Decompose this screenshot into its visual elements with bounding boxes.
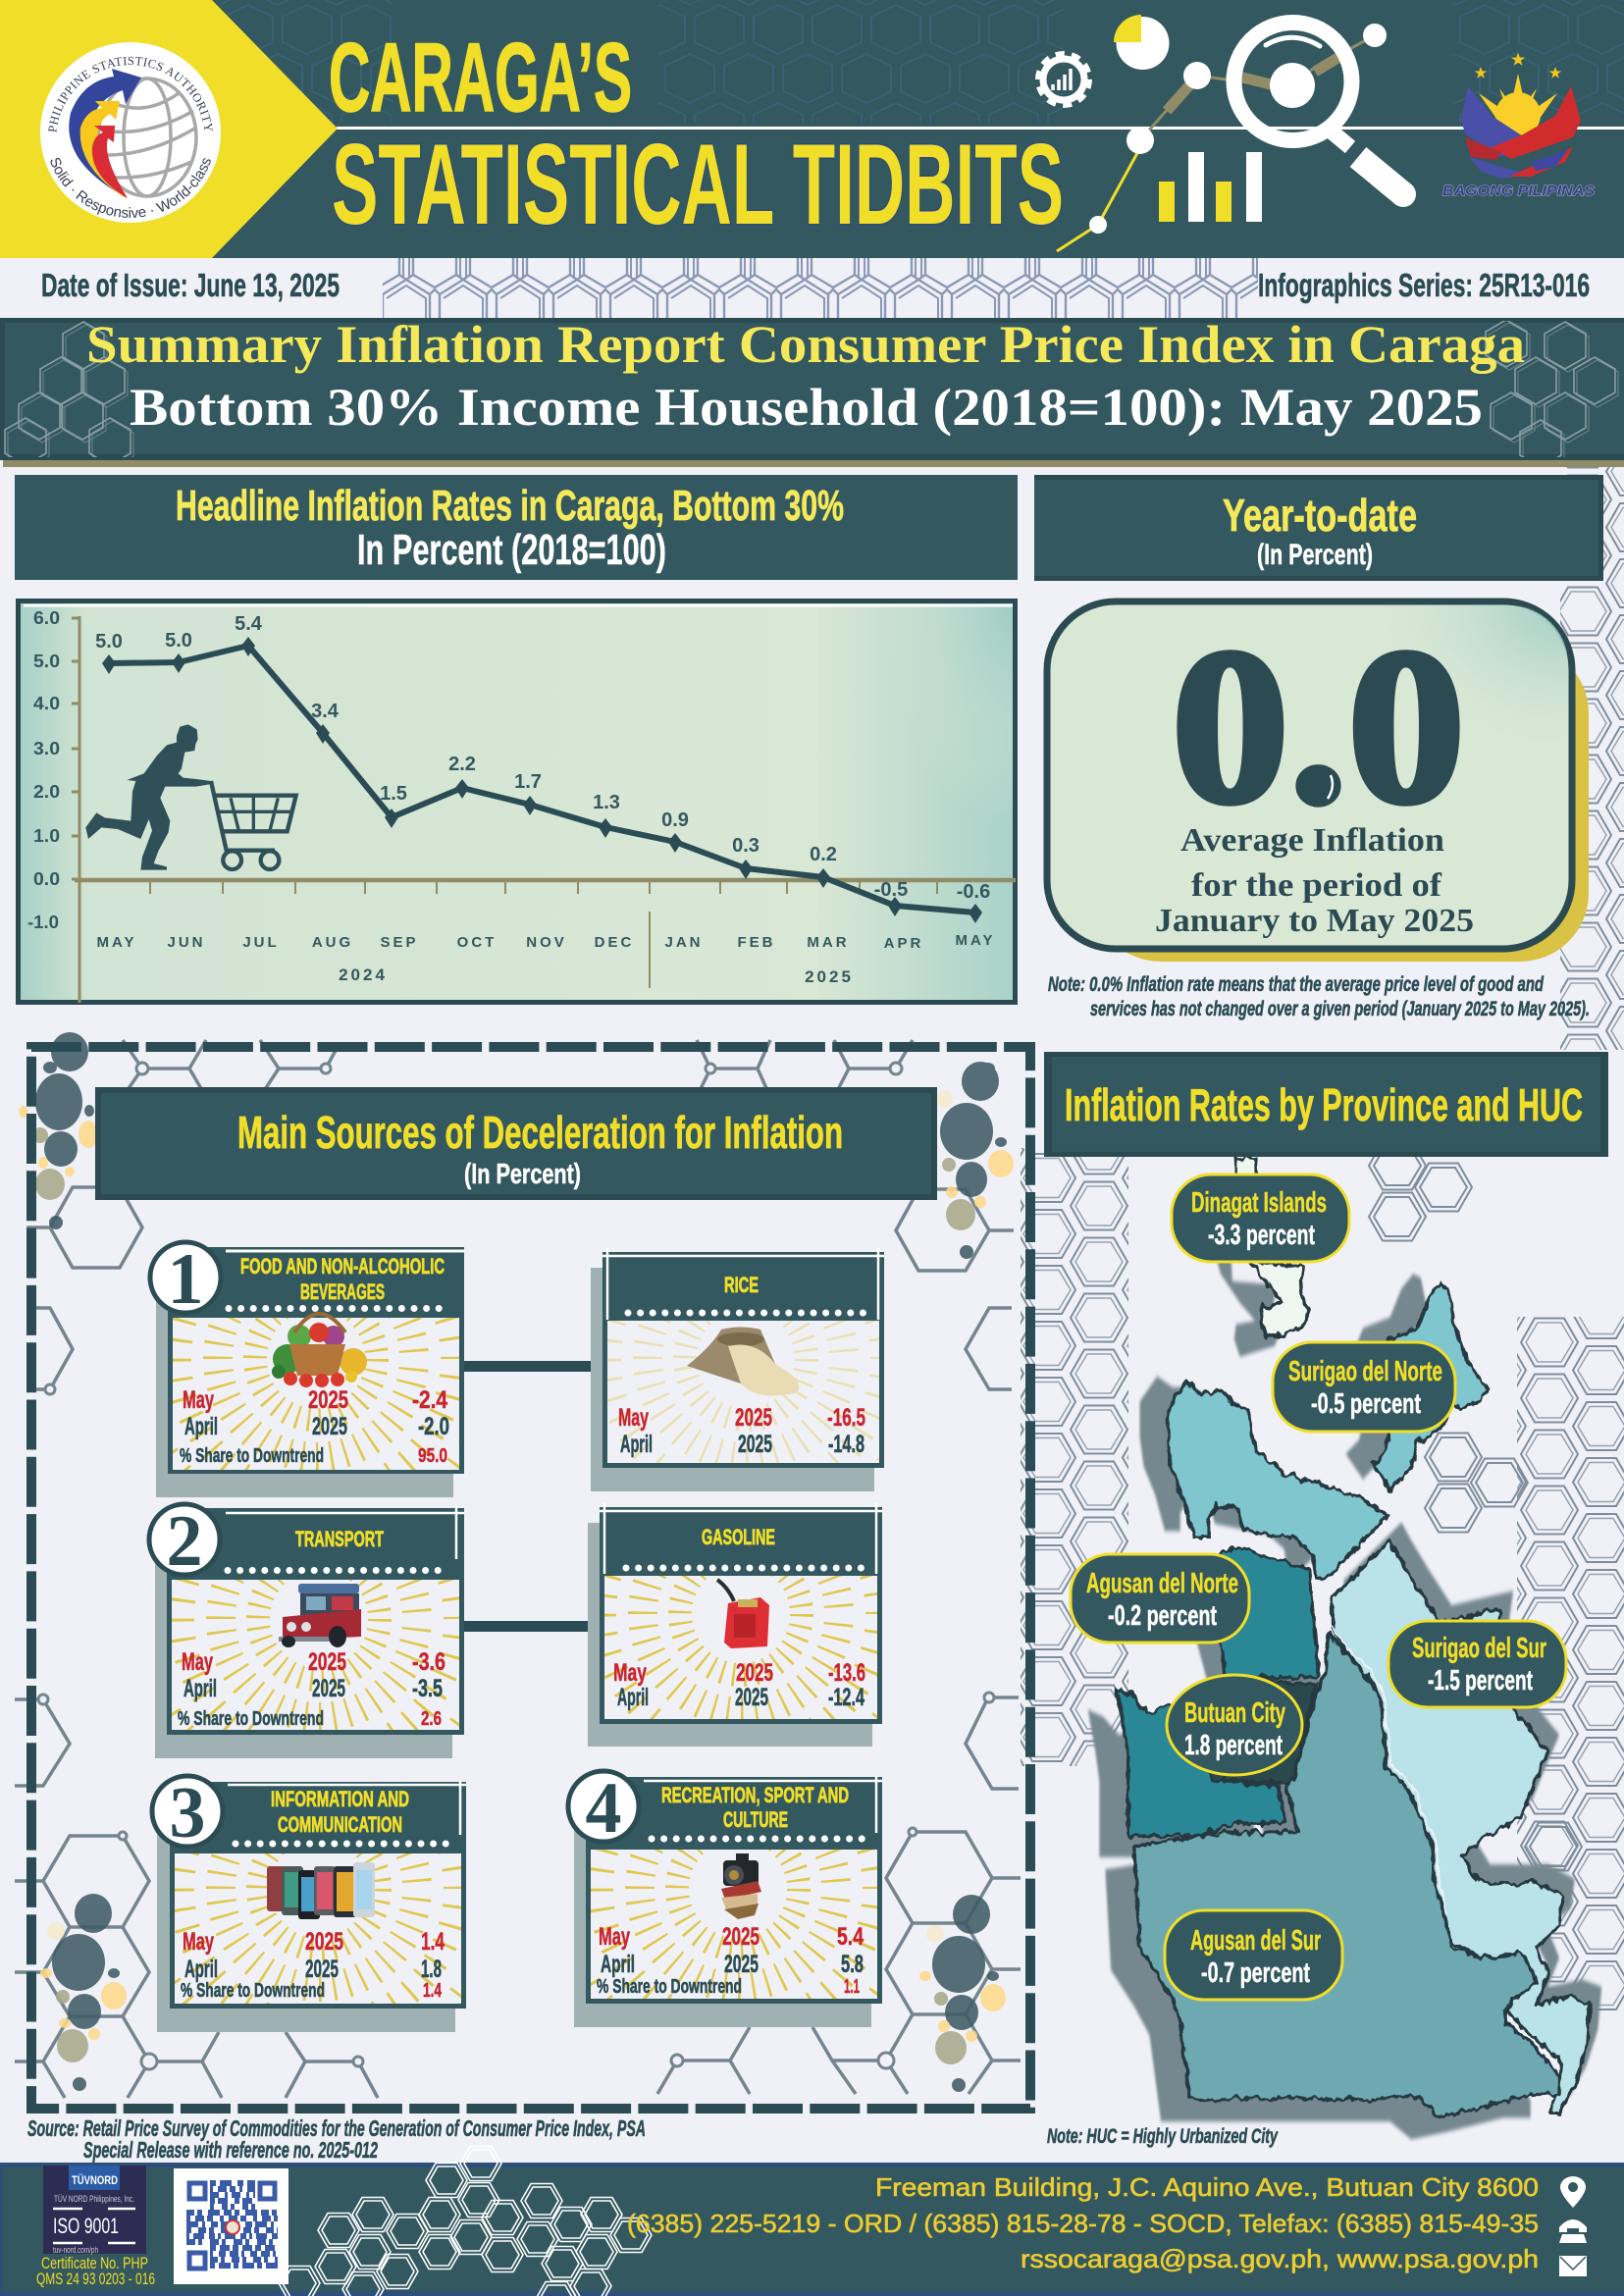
heading: headline inflation rates: Headline Inflation Rates in Caraga, Bottom 30% (176, 482, 844, 530)
title: Caraga's Statistical Tidbits: STATISTICAL TIDBITS (332, 120, 1064, 248)
values: food: 95.0 (418, 1445, 447, 1467)
heading: headline inflation rates: In Percent (2018=100) (357, 526, 666, 574)
data labels: 0.3 (732, 835, 760, 857)
values: information: 1.4 (423, 1980, 443, 2002)
icon: location pin (1560, 2176, 1586, 2208)
callout: Dinagat Islands (1172, 1174, 1349, 1262)
value caption: for the period of (1191, 867, 1442, 904)
source note: Special Release with reference no. 2025-012 (83, 2137, 378, 2163)
background hexagons: right edge (1560, 467, 1624, 1050)
icon: magnifier with data network (1057, 15, 1416, 251)
card 3: information and communication: INFORMATION AND (271, 1787, 409, 1811)
month labels (97, 912, 995, 988)
y axis: 5.0 (33, 652, 60, 671)
y axis (27, 608, 1016, 1003)
data labels: 0.9 (661, 809, 689, 831)
logo: Bagong Pilipinas: ★ (1475, 65, 1488, 80)
values: recreation: 2025 (724, 1951, 759, 1978)
data labels: -0.5 (874, 879, 908, 901)
callout: Dinagat Islands: -3.3 percent (1208, 1220, 1315, 1251)
callout: Surigao del Sur: Surigao del Sur (1412, 1633, 1546, 1664)
month labels: OCT (457, 934, 497, 951)
source note: Source: Retail Price Survey of Commodities for the Generation of Consumer Price Index, PSA (27, 2115, 646, 2141)
icon: smartphones (267, 1862, 375, 1919)
ISO certification badge: tuv-nord.com/ph (53, 2245, 98, 2255)
values: transport: -3.6 (412, 1648, 445, 1676)
values: rice: 2025 (735, 1404, 772, 1432)
card 2a: gasoline (588, 1503, 882, 1747)
y axis: 1.0 (33, 826, 60, 846)
data labels: 5.4 (235, 613, 263, 635)
values: information: % Share to Downtrend (181, 1980, 325, 2002)
values: gasoline: May (613, 1659, 647, 1687)
heading: main sources of deceleration: (In Percent) (464, 1159, 581, 1190)
card 3: information and communication: COMMUNICATION (278, 1812, 402, 1837)
data labels: 1.5 (380, 783, 407, 805)
data labels: -0.6 (957, 881, 990, 903)
callout: Agusan del Sur: Agusan del Sur (1190, 1925, 1321, 1957)
title band: Summary Inflation Report Consumer Price Index in Caraga (86, 315, 1525, 374)
month labels: 2025 (805, 967, 854, 986)
heading: headline inflation rates (15, 475, 1018, 580)
contact details: rssocaraga@psa.gov.ph, www.psa.gov.ph (1021, 2244, 1539, 2273)
title: Caraga's Statistical Tidbits (329, 23, 1064, 248)
footer (0, 2147, 1624, 2296)
values: recreation: May (599, 1923, 630, 1951)
y axis: -1.0 (27, 913, 59, 932)
values: food: % Share to Downtrend (180, 1445, 324, 1467)
contact details: Freeman Building, J.C. Aquino Ave., Butuan City 8600 (875, 2172, 1539, 2202)
values: recreation: 5.8 (841, 1951, 864, 1978)
values: transport: % Share to Downtrend (178, 1708, 324, 1730)
footer hexagons (279, 2147, 652, 2296)
card 1: food and non-alcoholic beverages (147, 1240, 464, 1497)
main panel decoration nodes (38, 1063, 994, 2069)
values: transport: April (183, 1675, 217, 1702)
data labels: 5.0 (165, 630, 192, 652)
date strip: Date of Issue: June 13, 2025 (41, 267, 340, 303)
values: food: 2025 (308, 1386, 348, 1414)
y axis: 6.0 (33, 608, 60, 628)
month labels: NOV (526, 934, 567, 951)
header banner (0, 0, 1624, 258)
main panel bubbles: bottom left (40, 1894, 127, 2091)
title band: Bottom 30% Income Household (2018=100): May 2025 (130, 378, 1483, 437)
values: transport (178, 1648, 445, 1730)
values: information: 1.8 (421, 1956, 442, 1983)
month labels: MAR (807, 934, 850, 951)
callout: Dinagat Islands: Dinagat Islands (1191, 1187, 1327, 1219)
icon: shopper with cart (85, 724, 296, 870)
icon: gear with chart (1038, 54, 1089, 105)
card 2: transport (147, 1501, 464, 1758)
values: gasoline: -13.6 (828, 1659, 865, 1687)
values: transport: May (182, 1648, 213, 1676)
logo: Bagong Pilipinas (1442, 52, 1595, 199)
heading: year-to-date: (In Percent) (1257, 539, 1373, 571)
map shadows (1088, 1176, 1601, 2139)
number badge 2: 2 (167, 1501, 202, 1582)
values: transport: 2025 (308, 1648, 346, 1676)
logo: Bagong Pilipinas: BAGONG PILIPINAS (1442, 183, 1595, 199)
values: information: 1.4 (421, 1928, 445, 1956)
main panel network decoration (15, 1040, 1021, 2098)
month labels: JUN (167, 934, 206, 951)
y axis: 4.0 (33, 694, 60, 713)
number badge 4: 4 (585, 1768, 622, 1849)
logo: Philippine Statistics Authority: PHILIPPINE STATISTICS AUTHORITY (48, 57, 213, 132)
callout: Surigao del Norte: -0.5 percent (1311, 1388, 1421, 1420)
contact details (627, 2172, 1539, 2273)
main panel bubbles: top left (19, 1032, 98, 1229)
values: recreation: % Share to Downtrend (597, 1976, 742, 1998)
month labels: SEP (380, 934, 419, 951)
icon: camera on books (721, 1853, 761, 1919)
month labels: MAY (97, 934, 136, 951)
connector lines (464, 1361, 591, 1632)
values: transport: -3.5 (412, 1675, 443, 1702)
main panel bubbles: bottom right (919, 1895, 1006, 2092)
callout: Surigao del Sur: -1.5 percent (1428, 1665, 1533, 1696)
title band (0, 315, 1624, 470)
icon: jeepney (279, 1584, 361, 1647)
values: information: April (184, 1956, 218, 1983)
card 1: food and non-alcoholic beverages: FOOD AND NON-ALCOHOLIC (240, 1254, 445, 1278)
values: rice: May (618, 1404, 649, 1432)
source note (27, 2115, 646, 2163)
logo: Bagong Pilipinas: ★ (1511, 52, 1526, 69)
contact details: (6385) 225-5219 - ORD / (6385) 815-28-78 - SOCD, Telefax: (6385) 815-49-35 (627, 2209, 1539, 2238)
main panel bubbles: top right (937, 1062, 1014, 1259)
values: information (181, 1928, 445, 2002)
callout: Butuan City: Butuan City (1184, 1697, 1285, 1729)
data labels (95, 613, 990, 903)
number badge 1: 1 (167, 1239, 204, 1320)
heading: inflation rates by province and HUC (1044, 1052, 1608, 1157)
card 3: information and communication (149, 1774, 466, 2032)
month labels: FEB (738, 934, 775, 951)
values: recreation (597, 1923, 864, 1998)
y axis: 0.0 (33, 869, 60, 889)
icon: telephone (1559, 2219, 1587, 2243)
y axis: 3.0 (33, 739, 60, 758)
line chart: headline inflation (18, 600, 1016, 1003)
QR code (174, 2168, 288, 2284)
month labels: APR (884, 935, 923, 952)
values: rice: -14.8 (828, 1431, 864, 1458)
values: information: May (183, 1928, 214, 1956)
data labels: 2.2 (448, 754, 476, 775)
values: food: -2.4 (412, 1386, 447, 1414)
values: recreation: 5.4 (837, 1923, 864, 1951)
callout: Surigao del Sur (1388, 1621, 1566, 1707)
values: transport: 2.6 (421, 1708, 442, 1730)
callout: Agusan del Sur: -0.7 percent (1201, 1957, 1310, 1989)
dashed frame: main sources (31, 1047, 1030, 2109)
card 4: recreation, sport and culture (565, 1768, 882, 2027)
number badge 1 (150, 1239, 221, 1320)
ISO certification badge (36, 2166, 155, 2288)
values: rice: 2025 (738, 1431, 772, 1458)
icon: vegetable basket (272, 1314, 367, 1387)
data labels: 5.0 (95, 631, 123, 652)
number badge 2 (149, 1501, 220, 1582)
values: transport: 2025 (312, 1675, 345, 1702)
card 4: recreation, sport and culture: CULTURE (723, 1807, 788, 1832)
month labels: DEC (595, 934, 634, 951)
card 2a: gasoline: GASOLINE (702, 1525, 775, 1549)
month labels: JAN (664, 934, 704, 951)
icon: red gas can (717, 1580, 769, 1648)
number badge 3 (152, 1773, 223, 1853)
big value: 0.0 (1172, 603, 1465, 849)
heading: year-to-date (1034, 475, 1603, 581)
value caption (1155, 822, 1474, 939)
callout: Agusan del Sur (1165, 1910, 1342, 2000)
y axis: 2.0 (33, 782, 60, 802)
card 1a: rice: RICE (724, 1273, 759, 1297)
values: food: -2.0 (418, 1413, 449, 1440)
panel: year-to-date value (1047, 601, 1589, 962)
map: provinces of Caraga (1088, 1159, 1601, 2139)
values: rice: -16.5 (827, 1404, 865, 1432)
data labels: 3.4 (311, 701, 340, 722)
values: recreation: 2025 (722, 1923, 760, 1951)
icon: envelope (1559, 2256, 1587, 2276)
icon: rice sack (687, 1327, 799, 1395)
card 1a: rice (591, 1248, 884, 1491)
values: gasoline (613, 1659, 865, 1711)
note: zero inflation (1048, 973, 1590, 1020)
date strip (0, 258, 1624, 318)
data labels: 1.7 (514, 771, 542, 793)
data labels: 0.2 (810, 844, 837, 865)
callout: Agusan del Norte: -0.2 percent (1108, 1600, 1217, 1632)
value caption: January to May 2025 (1155, 903, 1474, 939)
ISO certification badge: QMS 24 93 0203 - 016 (36, 2270, 155, 2288)
callout: Agusan del Norte: Agusan del Norte (1086, 1568, 1238, 1599)
values: gasoline: April (617, 1684, 649, 1711)
heading: main sources of deceleration (95, 1087, 937, 1200)
values: recreation: 1.1 (844, 1976, 860, 1998)
values: gasoline: 2025 (736, 1659, 773, 1687)
heading: year-to-date: Year-to-date (1223, 490, 1417, 541)
map regions (1117, 1159, 1590, 2116)
title: Caraga's Statistical Tidbits: CARAGA’S (329, 23, 632, 131)
values: food (180, 1386, 449, 1467)
month labels: MAY (956, 932, 995, 949)
number badge 3: 3 (169, 1773, 206, 1853)
values: rice: April (620, 1431, 653, 1458)
values: recreation: April (601, 1951, 635, 1978)
callout: Butuan City: 1.8 percent (1184, 1730, 1283, 1761)
card 4: recreation, sport and culture: RECREATION, SPORT AND (661, 1783, 849, 1807)
values: information: 2025 (305, 1956, 339, 1983)
callout: Surigao del Norte (1273, 1342, 1455, 1432)
callout: Agusan del Norte (1071, 1554, 1249, 1643)
note: HUC: Note: HUC = Highly Urbanized City (1047, 2125, 1279, 2148)
values: food: 2025 (312, 1413, 347, 1440)
values: information: 2025 (305, 1928, 343, 1956)
logo: Bagong Pilipinas: ★ (1549, 65, 1562, 80)
ISO certification badge: TÜVNORD (72, 2172, 118, 2187)
values: gasoline: -12.4 (828, 1684, 864, 1711)
month labels: JUL (242, 934, 280, 951)
ISO certification badge: TÜV NORD Philippines, Inc. (54, 2194, 134, 2204)
month labels: 2024 (339, 965, 388, 984)
ISO certification badge: Certificate No. PHP (41, 2254, 148, 2272)
data labels: 1.3 (593, 792, 620, 813)
month labels: AUG (312, 934, 353, 951)
ISO certification badge: ISO 9001 (53, 2214, 119, 2238)
data line (102, 637, 982, 923)
background hexagons: province map area (1021, 1142, 1624, 2011)
values: food: April (184, 1413, 218, 1440)
card 1: food and non-alcoholic beverages: BEVERAGES (300, 1279, 385, 1304)
value caption: Average Inflation (1180, 822, 1444, 859)
callout: Surigao del Norte: Surigao del Norte (1288, 1356, 1442, 1387)
values: gasoline: 2025 (735, 1684, 768, 1711)
logo: Philippine Statistics Authority: Solid · Responsive · World-class (51, 157, 211, 218)
logo: Philippine Statistics Authority (40, 42, 221, 223)
number badge 4 (568, 1768, 639, 1849)
values: food: May (183, 1386, 214, 1414)
card 2: transport: TRANSPORT (295, 1527, 384, 1551)
callout: Butuan City (1167, 1675, 1302, 1775)
heading: main sources of deceleration: Main Sources of Deceleration for Inflation (237, 1107, 843, 1158)
values: rice (618, 1404, 865, 1458)
